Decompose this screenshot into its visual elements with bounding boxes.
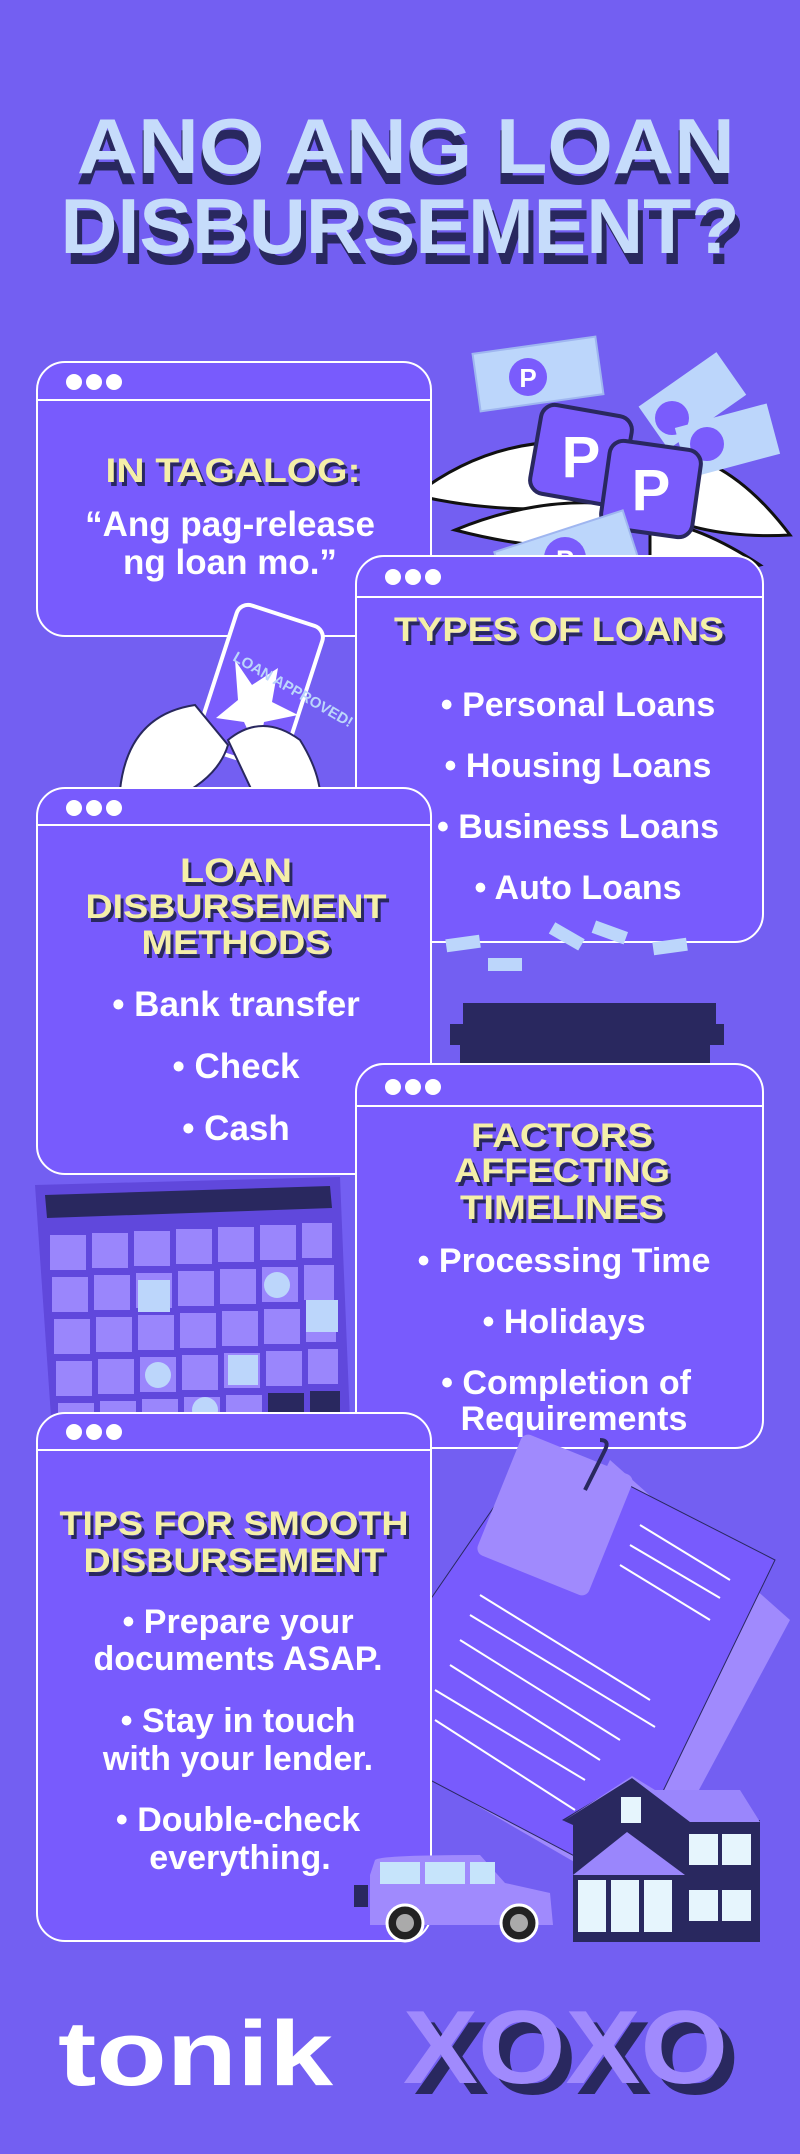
heading: factors	[454, 1117, 673, 1231]
illustration: flying money with wings: P	[556, 545, 574, 575]
list: factors: • Processing Time	[418, 1242, 710, 1280]
illustration: phone with hands: LOAN APPROVED!	[230, 649, 356, 731]
list: factors: Requirements	[461, 1400, 687, 1438]
logo: tonik: tonik	[58, 2003, 334, 2105]
heading: methods: METHODS	[142, 924, 330, 962]
illustration: phone with hands	[120, 602, 356, 823]
illustration: flying money with wings: P	[519, 363, 537, 393]
logo: XOXO: XOXO	[403, 1990, 728, 2106]
panel: factors affecting timelines	[356, 1064, 763, 1448]
heading: methods: DISBURSEMENT	[88, 892, 390, 930]
heading: tips: DISBURSEMENT	[84, 1542, 385, 1580]
heading: methods: LOAN	[183, 856, 295, 894]
panel: in tagalog	[37, 362, 431, 636]
list: loan types: • Business Loans	[437, 808, 719, 846]
title	[60, 102, 744, 281]
list: loan types: • Personal Loans	[441, 686, 715, 724]
list: tips: everything.	[149, 1839, 331, 1877]
illustration: flying money with wings	[415, 337, 790, 607]
list: tips: • Double-check	[116, 1801, 360, 1839]
heading: tips: TIPS FOR SMOOTH	[62, 1509, 412, 1547]
heading: tips	[60, 1505, 412, 1584]
quote text	[85, 505, 375, 582]
list: factors: • Completion of	[441, 1364, 692, 1402]
heading: factors: AFFECTING	[454, 1152, 670, 1190]
heading: factors: AFFECTING	[457, 1156, 673, 1194]
illustration: calendar	[35, 1177, 352, 1475]
title: ANO ANG LOAN	[77, 102, 735, 190]
list: tips: documents ASAP.	[93, 1640, 383, 1678]
heading: in tagalog: IN TAGALOG:	[106, 452, 360, 490]
illustration: flying money with wings: P	[632, 458, 670, 523]
list: methods: • Check	[172, 1047, 300, 1086]
heading: factors: TIMELINES	[460, 1189, 664, 1227]
heading: methods: LOAN	[180, 852, 292, 890]
heading: factors: FACTORS	[474, 1121, 656, 1159]
heading: methods: DISBURSEMENT	[86, 888, 387, 926]
title: DISBURSEMENT?	[60, 182, 740, 270]
illustration: documents with paperclip	[430, 1432, 790, 1900]
heading: factors: FACTORS	[471, 1117, 653, 1155]
list: methods: • Bank transfer	[112, 985, 360, 1024]
heading: tips: TIPS FOR SMOOTH	[60, 1505, 408, 1543]
heading: tips: DISBURSEMENT	[86, 1546, 388, 1584]
list: tips: • Stay in touch	[121, 1702, 355, 1740]
panel: loan disbursement methods	[37, 788, 431, 1174]
heading: methods: METHODS	[144, 928, 334, 966]
heading: methods	[86, 852, 390, 966]
heading: factors: TIMELINES	[463, 1193, 667, 1231]
heading: types of loans: TYPES OF LOANS	[397, 615, 727, 653]
quote text: ng loan mo.”	[123, 543, 337, 582]
list: tips: with your lender.	[102, 1740, 373, 1778]
list: tips	[93, 1603, 383, 1877]
list: loan types: • Housing Loans	[445, 747, 711, 785]
illustration: house	[562, 1776, 760, 1942]
list: factors	[418, 1242, 710, 1438]
illustration: flying money with wings: P	[562, 425, 600, 490]
list: tips: • Prepare your	[122, 1603, 354, 1641]
heading: types of loans: TYPES OF LOANS	[394, 611, 724, 649]
panel: types of loans	[356, 556, 763, 942]
heading: in tagalog: IN TAGALOG:	[108, 456, 364, 494]
title: ANO ANG LOAN	[76, 113, 734, 201]
panel: tips for smooth disbursement	[37, 1413, 431, 1941]
list: methods: • Cash	[182, 1109, 290, 1148]
list: loan types	[437, 686, 719, 907]
list: factors: • Holidays	[482, 1303, 646, 1341]
illustration: car	[354, 1855, 553, 1941]
quote text: “Ang pag-release	[85, 505, 375, 544]
list: methods	[112, 985, 360, 1148]
list: loan types: • Auto Loans	[474, 869, 682, 907]
illustration: stacks of money	[445, 921, 737, 1088]
title: DISBURSEMENT?	[66, 193, 744, 281]
logo: XOXO: XOXO	[414, 2001, 739, 2117]
